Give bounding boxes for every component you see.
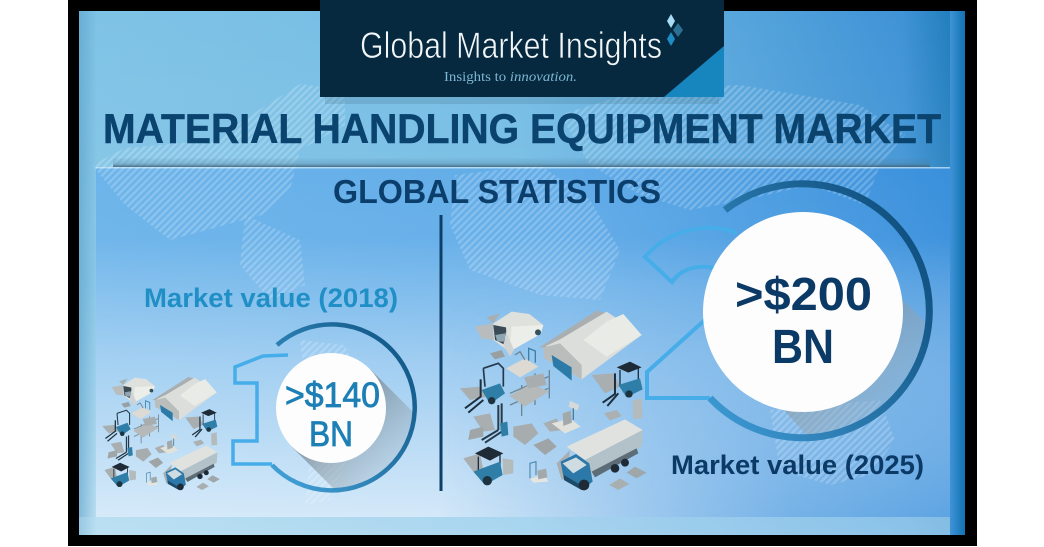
panel: statistics background [79, 167, 950, 535]
icon: numeral one outline [233, 355, 288, 464]
world map hatching [92, 84, 905, 505]
panel: market value 2025 [460, 180, 933, 490]
logo tagline: Insights to innovation. [444, 69, 577, 84]
value text: >$200 [735, 268, 872, 320]
value circle [276, 353, 386, 463]
icon: material handling equipment small [102, 377, 220, 490]
value text: >$140 [285, 376, 380, 415]
unit text: BN [772, 321, 834, 374]
ring [272, 324, 415, 490]
centre divider [440, 215, 442, 491]
subtitle: GLOBAL STATISTICS [333, 173, 661, 210]
title: MATERIAL HANDLING EQUIPMENT MARKET [103, 105, 941, 152]
icon: numeral two outline [645, 228, 737, 398]
panel: market value 2018 [102, 288, 417, 493]
long shadow [292, 369, 412, 488]
ring [710, 184, 929, 438]
heading: market value 2018: Market value (2018) [144, 283, 398, 313]
icon: material handling equipment large [460, 311, 647, 490]
logo corner triangle [664, 46, 724, 97]
logo diamonds [667, 14, 683, 46]
unit text: BN [309, 415, 353, 454]
logo banner [320, 0, 724, 104]
heading: market value 2025: Market value (2025) [671, 450, 924, 480]
value circle [703, 212, 903, 412]
long shadow [784, 299, 925, 434]
logo wordmark: Global Market Insights [360, 25, 662, 66]
title underline [113, 158, 930, 167]
